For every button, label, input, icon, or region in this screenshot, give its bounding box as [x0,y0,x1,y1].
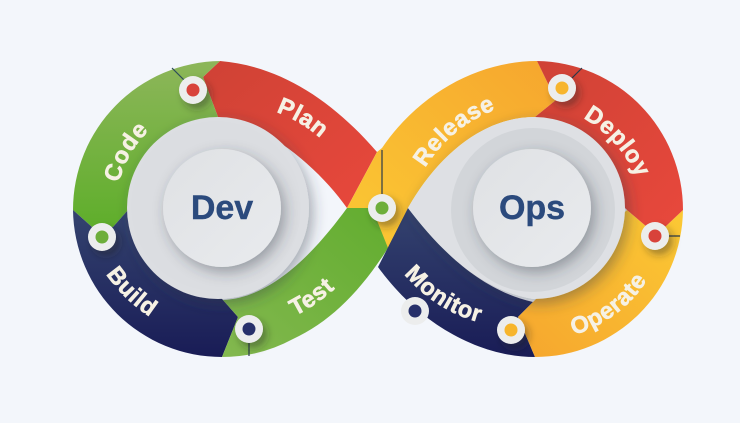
label: Dev: Dev [191,189,253,227]
node: Monitor [401,297,429,325]
connector lines [249,68,680,356]
node: Release/Deploy [548,74,576,102]
node: Build/Test [235,315,263,343]
label: Release: Release [412,100,494,167]
label: Monitor: Monitor [404,264,482,322]
node: center crossing [368,194,396,222]
label: Deploy: Deploy [584,104,649,174]
label: Operate: Operate [571,276,645,334]
Dev hub [127,117,309,299]
node: Deploy/Operate [641,222,669,250]
node: Operate/Monitor [497,316,525,344]
segment: Release [347,61,556,250]
node: Code/Build [88,223,116,251]
label: Test: Test [287,278,336,314]
label: Build: Build [106,265,159,316]
segment: Test [222,208,388,357]
panel: Dev loop [73,61,377,357]
segment: Build [73,210,238,357]
connector line: Code [172,68,184,80]
segment: Operate [518,210,683,357]
segment: Deploy [535,61,683,227]
segment: Code [73,61,220,227]
label: Plan: Plan [277,97,326,138]
node markers [88,74,669,344]
segment: Plan [203,61,377,208]
segment labels [104,97,649,334]
segment: Monitor [378,208,535,357]
label: Code: Code [104,124,146,180]
Ops hub [408,117,625,299]
node: Plan/Code [179,76,207,104]
panel: Ops loop [222,61,683,357]
label: Ops: Ops [499,189,565,227]
